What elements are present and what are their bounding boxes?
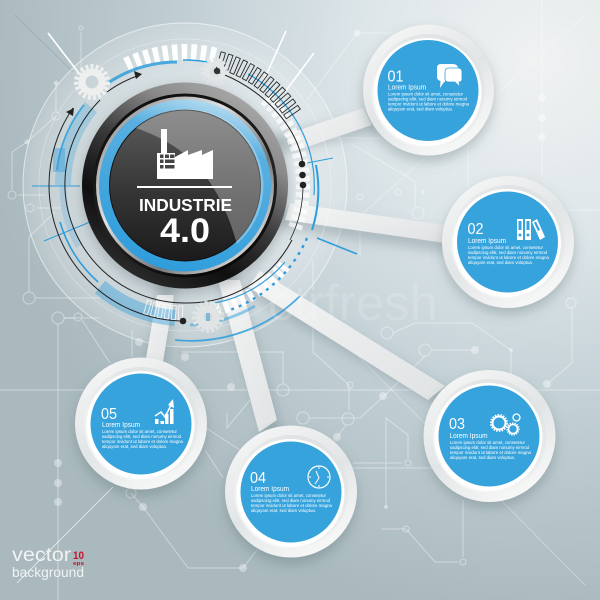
body text: aliquyam erat, sed diam voluptua.	[102, 444, 167, 449]
panel 01	[362, 24, 494, 162]
brand: vector background: 10	[73, 550, 84, 562]
gear: bottom	[194, 304, 222, 330]
number: 03	[449, 416, 465, 433]
body text: Lorem ipsum dolor sit amet, consetetur	[450, 440, 525, 445]
black arcs	[49, 108, 183, 321]
title: Lorem Ipsum	[251, 484, 289, 493]
connector: circle 2	[285, 203, 446, 243]
factory windows	[160, 154, 174, 168]
arc arrowheads	[66, 71, 142, 116]
brand: vector background: background	[12, 564, 84, 580]
brand: vector background: eps	[73, 561, 84, 567]
gear: top right	[203, 60, 227, 84]
white outlined ticks at bottom	[144, 300, 183, 320]
body text: aliquyam erat, sed diam voluptua.	[388, 106, 453, 112]
connector: circle 5	[146, 295, 174, 362]
outlined ticks	[216, 52, 300, 119]
body text: sadipscing elitr, sed diam nonumy eirmod	[251, 498, 330, 503]
body text: aliquyam erat, sed diam voluptua.	[251, 508, 316, 513]
number: 05	[101, 406, 117, 423]
icon: binders	[517, 219, 545, 240]
connector: circle 3	[248, 271, 445, 400]
title: Lorem Ipsum	[450, 431, 488, 440]
main button	[81, 82, 289, 294]
blue arcs	[108, 62, 177, 83]
body text	[251, 493, 332, 513]
body text	[468, 245, 549, 265]
body text: tempor invidunt ut labore et dolore magna	[102, 439, 183, 444]
number: 02	[468, 221, 484, 238]
title: Lorem Ipsum	[468, 236, 506, 245]
body text: Lorem ipsum dolor sit amet, consetetur	[251, 493, 326, 498]
circuit nodes	[24, 30, 551, 572]
connector: circle 1	[285, 108, 372, 151]
gear: top left	[76, 66, 108, 98]
body text: tempor invidunt ut labore et dolore magna	[468, 255, 549, 260]
body text: aliquyam erat, sed diam voluptua.	[450, 455, 515, 460]
body text	[450, 440, 531, 460]
watermark: ctrfresh	[268, 275, 438, 331]
button glass highlight	[136, 109, 263, 244]
brand: vector background: vector	[12, 545, 72, 566]
icon: clock	[308, 466, 330, 488]
panel 03	[424, 370, 556, 508]
body text	[102, 429, 183, 449]
body text: aliquyam erat, sed diam voluptua.	[468, 260, 533, 265]
title: Lorem Ipsum	[388, 82, 426, 92]
version number: 4.0	[160, 212, 210, 250]
title: Lorem Ipsum	[102, 420, 140, 429]
body text: tempor invidunt ut labore et dolore magna	[450, 450, 531, 455]
body text: sadipscing elitr, sed diam nonumy eirmod	[388, 96, 467, 102]
icon: growth chart	[155, 399, 174, 424]
panel 05	[75, 358, 207, 496]
divider	[137, 186, 232, 188]
icon: speech bubbles	[437, 64, 462, 88]
white rays	[48, 31, 314, 92]
halo disc	[23, 23, 347, 347]
panel 02	[442, 176, 574, 314]
body text	[388, 92, 469, 112]
body text: Lorem ipsum dolor sit amet, consetetur	[388, 92, 463, 96]
body text: tempor invidunt ut labore et dolore magna	[388, 102, 469, 106]
number: 04	[250, 470, 266, 487]
body text: Lorem ipsum dolor sit amet, consetetur	[468, 245, 543, 250]
brand: vector background	[12, 545, 84, 580]
body text: sadipscing elitr, sed diam nonumy eirmod	[450, 445, 529, 450]
connector: circle 4	[218, 280, 277, 432]
heading: INDUSTRIE	[139, 195, 232, 215]
white tick marks	[7, 7, 363, 363]
number: 01	[388, 68, 404, 86]
body text: sadipscing elitr, sed diam nonumy eirmod	[468, 250, 547, 255]
technology ring	[4, 4, 366, 366]
panel 04	[225, 426, 357, 564]
icon: gears	[491, 414, 520, 435]
body text: sadipscing elitr, sed diam nonumy eirmod	[102, 434, 181, 439]
body text: tempor invidunt ut labore et dolore magna	[251, 503, 332, 508]
factory icon	[157, 129, 213, 179]
translucent blue bands	[63, 107, 91, 185]
black dots	[180, 161, 306, 324]
connector shadows	[155, 122, 450, 440]
body text: Lorem ipsum dolor sit amet, consetetur	[102, 429, 177, 434]
